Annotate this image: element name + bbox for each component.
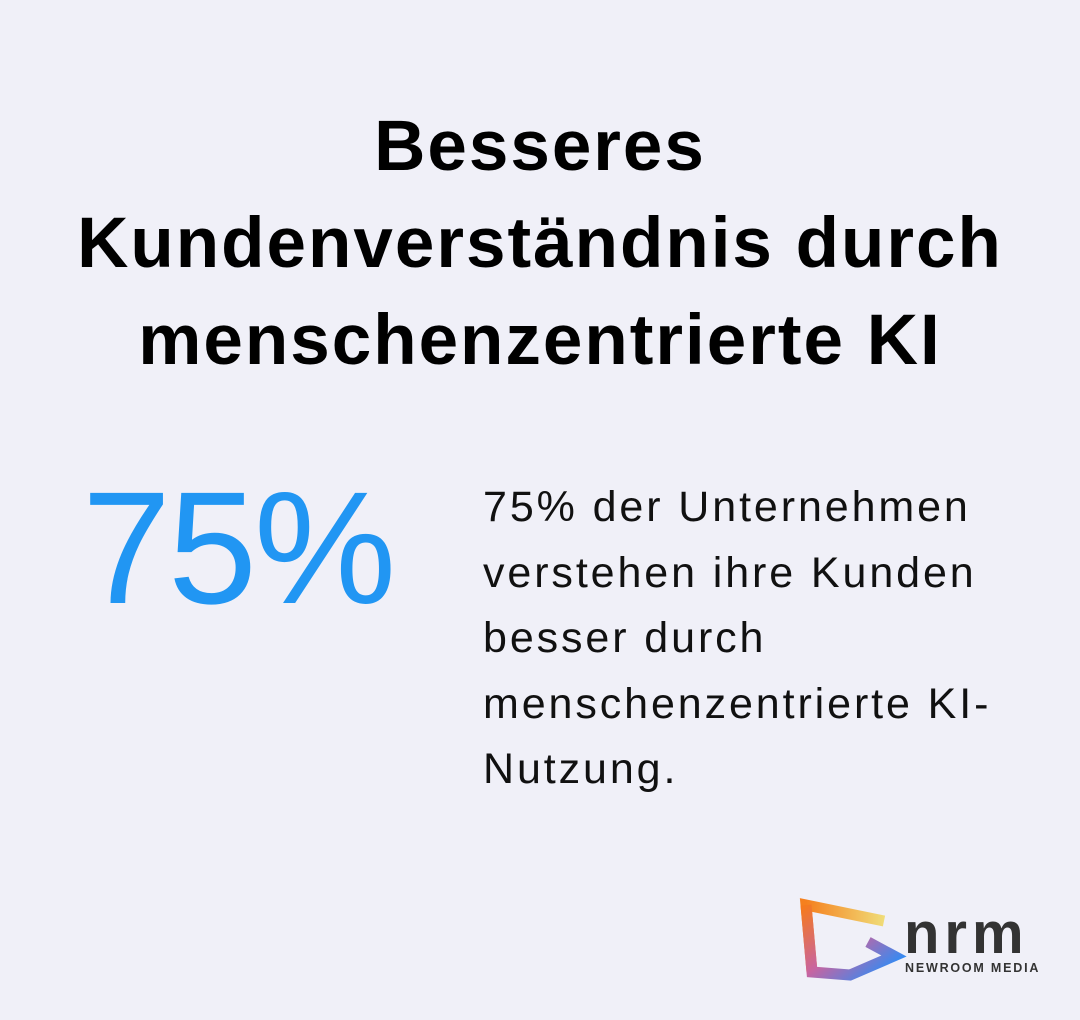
logo: NEWROOM MEDIA (905, 961, 1040, 975)
big stat: 75% (82, 458, 393, 637)
title: menschenzentrierte KI (138, 301, 942, 380)
logo (800, 898, 1040, 981)
description text: besser durch (483, 614, 766, 662)
title (77, 107, 1003, 380)
description text (483, 483, 991, 793)
title: Besseres (374, 107, 706, 186)
title: Kundenverständnis durch (77, 204, 1003, 283)
brand name: nrm (904, 901, 1029, 966)
description text: verstehen ihre Kunden (483, 548, 977, 596)
icon (806, 905, 894, 975)
description text: 75% der Unternehmen (483, 483, 971, 531)
description text: Nutzung. (483, 745, 678, 793)
description text: menschenzentrierte KI- (483, 680, 991, 728)
